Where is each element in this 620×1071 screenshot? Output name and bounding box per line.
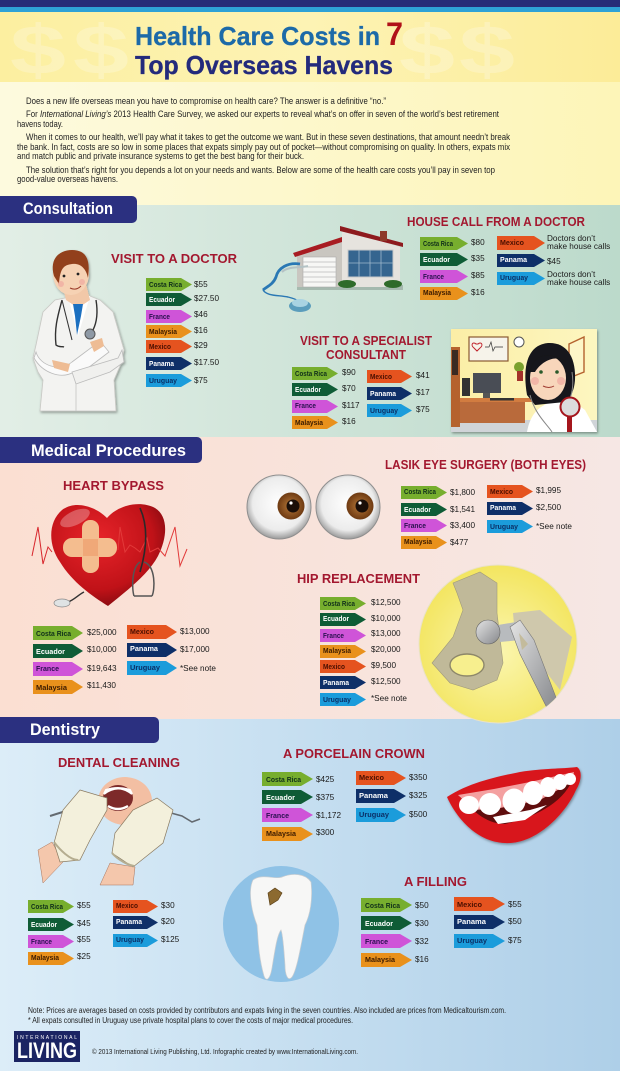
heading: Medical Procedures: Medical Procedures bbox=[31, 442, 186, 460]
icon: left eye bbox=[247, 475, 311, 539]
tag: Ecuador: Ecuador bbox=[365, 919, 393, 928]
tag: Costa Rica: $55 bbox=[194, 280, 208, 289]
intro text block: and match public and private insurance systems to get the best bang for their buck. bbox=[17, 151, 304, 161]
tag: Costa Rica bbox=[320, 597, 401, 610]
heading: visit to a doctor: VISIT TO A DOCTOR bbox=[111, 252, 237, 266]
tag: Costa Rica: $90 bbox=[342, 368, 356, 377]
chart: hip replacement prices bbox=[320, 597, 407, 706]
logo: International Living bbox=[14, 1031, 80, 1063]
dollar sign watermarks: $ bbox=[399, 11, 455, 89]
tag: Uruguay: Uruguay bbox=[149, 376, 178, 385]
chart: porcelain crown prices bbox=[262, 771, 428, 841]
tag: Costa Rica bbox=[292, 367, 356, 380]
heading: dental cleaning: DENTAL CLEANING bbox=[58, 756, 180, 770]
tag: Panama: $50 bbox=[508, 917, 522, 926]
tag: Uruguay: Uruguay bbox=[457, 936, 488, 945]
tag: Ecuador: $35 bbox=[471, 254, 485, 263]
tag: France: France bbox=[365, 937, 388, 946]
tag: Costa Rica: Costa Rica bbox=[36, 629, 72, 638]
tag: Uruguay: Uruguay bbox=[359, 810, 390, 819]
tag: France bbox=[146, 310, 208, 323]
tag: Panama: $325 bbox=[409, 791, 428, 800]
tag: Mexico: Mexico bbox=[323, 662, 345, 671]
tag: Panama: Panama bbox=[457, 917, 487, 926]
chart: specialist prices bbox=[292, 367, 430, 429]
illustration: doctor bbox=[33, 250, 124, 411]
tag: Ecuador bbox=[401, 503, 475, 516]
illustration: smiling lips bbox=[447, 767, 581, 843]
tag: Panama bbox=[356, 789, 428, 803]
tag: Mexico: $41 bbox=[416, 371, 430, 380]
tag: Ecuador: $10,000 bbox=[371, 614, 401, 623]
chart: dental cleaning prices bbox=[28, 900, 180, 965]
tag: Ecuador: $375 bbox=[316, 793, 335, 802]
tag: Uruguay bbox=[497, 270, 610, 287]
tag: Mexico: Mexico bbox=[149, 342, 171, 351]
tag: Malaysia: Malaysia bbox=[149, 327, 178, 336]
tag: Panama: $17 bbox=[416, 388, 430, 397]
intro text block: the bank. In fact, costs are so low in some places that expats simply pay out of pocket—without compromising on quality. In others, expats mix bbox=[17, 142, 511, 152]
tag: France bbox=[401, 519, 475, 532]
tag: Ecuador: Ecuador bbox=[323, 614, 349, 623]
logo: International Living: LIVING bbox=[17, 1038, 77, 1063]
tag: Mexico: Mexico bbox=[130, 627, 154, 636]
tag: Malaysia bbox=[361, 953, 429, 967]
tag: Malaysia: Malaysia bbox=[36, 683, 68, 692]
intro text block: When it comes to our health, we’ll pay what it takes to get the outcome we want. But in these seven destinations, that amount needn’t break bbox=[26, 132, 511, 142]
tag: Ecuador bbox=[262, 790, 335, 804]
tag: Uruguay: Uruguay bbox=[116, 935, 145, 944]
dollar sign watermarks: $ bbox=[10, 11, 66, 89]
tag: France: $117 bbox=[342, 401, 360, 410]
tag: Uruguay: *See note bbox=[536, 522, 572, 531]
tag: Uruguay: $500 bbox=[409, 810, 428, 819]
tag: France bbox=[320, 629, 401, 642]
tag: Panama: Panama bbox=[359, 791, 389, 800]
tag: France bbox=[292, 400, 360, 413]
tag: Panama: Panama bbox=[500, 255, 528, 264]
tag: France: $32 bbox=[415, 937, 429, 946]
tag: Mexico bbox=[320, 660, 396, 673]
heading: Consultation bbox=[0, 196, 137, 223]
chart: filling prices bbox=[361, 897, 522, 967]
tag: Panama: Panama bbox=[370, 389, 397, 398]
tag: Mexico: make house calls bbox=[547, 242, 610, 251]
tag: France: France bbox=[149, 312, 170, 321]
heading: hip replacement: HIP REPLACEMENT bbox=[297, 572, 420, 586]
tag: Malaysia: Malaysia bbox=[423, 288, 452, 297]
tag: Malaysia: $477 bbox=[450, 538, 469, 547]
tag: Panama: $17,000 bbox=[180, 645, 210, 654]
tag: Mexico: $29 bbox=[194, 341, 208, 350]
tag: Mexico: $13,000 bbox=[180, 627, 210, 636]
heading: Dentistry bbox=[0, 717, 159, 743]
tag: Costa Rica bbox=[28, 900, 91, 913]
tag: Panama: Panama bbox=[490, 503, 517, 512]
tag: Panama bbox=[113, 916, 175, 929]
tag: France: $46 bbox=[194, 310, 208, 319]
intro text block: The solution that’s right for you depends a lot on your needs and wants. Below are some of the health care costs you’ll pay in seven top bbox=[26, 165, 495, 175]
illustration: specialist in office bbox=[451, 329, 597, 432]
tag: Ecuador bbox=[320, 613, 401, 626]
tag: Malaysia: $25 bbox=[77, 952, 91, 961]
tag: Malaysia: $300 bbox=[316, 828, 335, 837]
tag: France: $19,643 bbox=[87, 664, 117, 673]
tag: Uruguay: Uruguay bbox=[323, 695, 352, 704]
chart: house call prices bbox=[420, 234, 610, 300]
heading: visit to a specialist consultant bbox=[300, 334, 432, 362]
tag: France: France bbox=[266, 811, 289, 820]
tag: Panama bbox=[146, 357, 219, 370]
tag: Mexico bbox=[146, 340, 208, 353]
heading: a filling: A FILLING bbox=[404, 875, 467, 889]
illustration: hip implant bbox=[419, 565, 577, 723]
tag: Costa Rica: $1,800 bbox=[450, 488, 475, 497]
tag: Malaysia bbox=[262, 827, 335, 841]
intro text block: For International Living’s 2013 Health Care Survey, we asked our experts to reveal what’s on offer in seven of the world’s best retirement bbox=[26, 109, 499, 119]
illustration: house with stethoscope bbox=[263, 226, 403, 312]
tag: Costa Rica: $50 bbox=[415, 901, 429, 910]
footnotes: Note: Prices are averages based on costs provided by contributors and expats living in the seven countries. Also included are prices from Medicaltourism.com. bbox=[28, 1006, 506, 1015]
tag: Costa Rica: $55 bbox=[77, 901, 91, 910]
tag: Ecuador: Ecuador bbox=[295, 385, 321, 394]
tag: Mexico: Mexico bbox=[490, 487, 513, 496]
illustration: gloved hands cleaning teeth bbox=[38, 777, 200, 885]
tag: France: France bbox=[323, 631, 344, 640]
intro text block: havens today. bbox=[17, 119, 63, 129]
tag: Mexico: Mexico bbox=[457, 900, 482, 909]
tag: Mexico: Mexico bbox=[359, 773, 384, 782]
tag: Mexico bbox=[367, 370, 430, 383]
tag: Costa Rica: $25,000 bbox=[87, 628, 117, 637]
intro text block bbox=[17, 96, 511, 184]
tag: Panama: $12,500 bbox=[371, 677, 401, 686]
illustration: pair of eyes bbox=[247, 475, 380, 539]
tag: Uruguay bbox=[454, 934, 522, 948]
heading: Medical Procedures bbox=[0, 437, 202, 463]
tag: Panama: Panama bbox=[116, 917, 143, 926]
tag: Uruguay bbox=[127, 661, 216, 675]
tag: Uruguay bbox=[367, 404, 430, 417]
illustration: heart with bandage bbox=[32, 504, 187, 607]
tag: Ecuador: $30 bbox=[415, 919, 429, 928]
tag: Panama: Panama bbox=[323, 678, 350, 687]
tag: Uruguay: $75 bbox=[416, 405, 430, 414]
tag: Uruguay: Uruguay bbox=[490, 522, 519, 531]
tag: Malaysia: Malaysia bbox=[323, 646, 352, 655]
tag: Mexico bbox=[487, 485, 561, 498]
tag: Malaysia bbox=[320, 645, 401, 658]
heading: house call from a doctor: HOUSE CALL FROM A DOCTOR bbox=[407, 215, 585, 229]
title: Top Overseas Havens bbox=[135, 50, 393, 80]
copyright line: © 2013 International Living Publishing, Ltd. Infographic created by www.InternationalLiving.com. bbox=[92, 1047, 358, 1056]
dollar sign watermarks: $ bbox=[73, 11, 129, 89]
title: Health Care Costs in bbox=[135, 21, 380, 51]
tag: Malaysia: $16 bbox=[471, 288, 485, 297]
tag: Panama bbox=[320, 676, 401, 689]
tag: Panama: $2,500 bbox=[536, 503, 561, 512]
footnotes: * All expats consulted in Uruguay use private hospital plans to cover the costs of major medical procedures. bbox=[28, 1016, 353, 1025]
tag: France bbox=[33, 662, 117, 676]
tag: Ecuador bbox=[292, 383, 356, 396]
dollar sign watermarks: $ bbox=[459, 11, 515, 89]
tag: Costa Rica bbox=[361, 898, 429, 912]
tag: Mexico bbox=[497, 234, 610, 251]
tag: Mexico bbox=[356, 771, 428, 785]
tag: France: France bbox=[31, 937, 52, 946]
tag: Uruguay bbox=[146, 374, 208, 387]
icon: right eye bbox=[316, 475, 380, 539]
tag: Uruguay: Doctors don’t bbox=[547, 270, 596, 279]
tag: France: France bbox=[36, 664, 59, 673]
tag: Malaysia bbox=[33, 680, 116, 694]
tag: Costa Rica: Costa Rica bbox=[31, 902, 64, 911]
tag: Malaysia bbox=[28, 952, 91, 965]
tag: Uruguay: $75 bbox=[508, 936, 522, 945]
tag: Costa Rica: Costa Rica bbox=[295, 369, 328, 378]
tag: Costa Rica bbox=[401, 486, 475, 499]
tag: Malaysia: Malaysia bbox=[365, 955, 396, 964]
tag: Uruguay bbox=[320, 693, 407, 706]
tag: Costa Rica: $12,500 bbox=[371, 598, 401, 607]
tag: Uruguay: $75 bbox=[194, 376, 208, 385]
tag: Ecuador bbox=[33, 644, 117, 658]
tag: France: $1,172 bbox=[316, 811, 341, 820]
tag: Costa Rica: Costa Rica bbox=[423, 239, 454, 248]
tag: Mexico bbox=[454, 897, 522, 911]
heading: Consultation: Consultation bbox=[23, 200, 113, 218]
tag: Malaysia: Malaysia bbox=[266, 829, 297, 838]
tag: Malaysia bbox=[292, 416, 356, 429]
tag: Ecuador: $1,541 bbox=[450, 505, 475, 514]
tag: Panama: $20 bbox=[161, 917, 175, 926]
chart: heart bypass prices bbox=[33, 625, 216, 694]
tag: Malaysia: $20,000 bbox=[371, 645, 401, 654]
logo: International Living: INTERNATIONAL bbox=[17, 1035, 77, 1041]
tag: Ecuador: $70 bbox=[342, 384, 356, 393]
tag: Uruguay: Uruguay bbox=[370, 406, 399, 415]
tag: Panama bbox=[127, 643, 210, 657]
tag: Ecuador bbox=[361, 916, 429, 930]
tag: Ecuador bbox=[28, 918, 91, 931]
tag: Uruguay bbox=[113, 934, 180, 947]
tag: Malaysia bbox=[420, 287, 485, 300]
tag: France bbox=[28, 935, 91, 948]
tag: Ecuador: Ecuador bbox=[423, 255, 450, 264]
intro text block: good-value overseas havens. bbox=[17, 174, 118, 184]
tag: Mexico: Mexico bbox=[370, 372, 392, 381]
tag: Mexico: Mexico bbox=[116, 901, 138, 910]
tag: Ecuador: $45 bbox=[77, 919, 91, 928]
tag: Malaysia: $16 bbox=[342, 417, 356, 426]
tag: Malaysia: Malaysia bbox=[31, 953, 60, 962]
tag: Costa Rica: Costa Rica bbox=[404, 487, 437, 496]
tag: Ecuador: Ecuador bbox=[266, 793, 295, 802]
tag: Mexico: Mexico bbox=[500, 238, 524, 247]
title bbox=[135, 16, 403, 80]
tag: France: France bbox=[423, 272, 444, 281]
tag: Uruguay: *See note bbox=[371, 694, 407, 703]
tag: France: $55 bbox=[77, 935, 91, 944]
tag: Costa Rica bbox=[146, 278, 208, 291]
tag: Panama: Panama bbox=[130, 644, 159, 653]
tag: Costa Rica bbox=[262, 772, 335, 786]
dollar sign watermarks bbox=[10, 11, 515, 89]
tag: Ecuador: Ecuador bbox=[149, 295, 175, 304]
tag: Ecuador bbox=[146, 293, 219, 306]
heading: visit to a specialist consultant: VISIT TO A SPECIALIST bbox=[300, 334, 432, 348]
tag: Ecuador bbox=[420, 253, 485, 266]
tag: Costa Rica bbox=[420, 237, 485, 250]
tag: Malaysia: Malaysia bbox=[295, 418, 324, 427]
tag: Uruguay bbox=[356, 808, 428, 822]
tag: Mexico: $30 bbox=[161, 901, 175, 910]
heading: lasik eye surgery: LASIK EYE SURGERY (BOTH EYES) bbox=[385, 458, 586, 472]
tag: Mexico: $55 bbox=[508, 900, 522, 909]
tag: France bbox=[361, 934, 429, 948]
chart: lasik prices bbox=[401, 485, 572, 549]
tag: Costa Rica: Costa Rica bbox=[266, 775, 302, 784]
tag: Mexico: Doctors don’t bbox=[547, 234, 596, 243]
tag: Ecuador: Ecuador bbox=[31, 920, 57, 929]
tag: Malaysia bbox=[146, 325, 208, 338]
tag: Mexico: $9,500 bbox=[371, 661, 396, 670]
tag: Uruguay bbox=[487, 520, 572, 533]
tag: Costa Rica: Costa Rica bbox=[323, 599, 356, 608]
tag: Malaysia: $16 bbox=[415, 955, 429, 964]
tag: Malaysia: $11,430 bbox=[87, 681, 116, 690]
heading: heart bypass: HEART BYPASS bbox=[63, 479, 164, 493]
tag: Costa Rica: $425 bbox=[316, 775, 335, 784]
tag: Mexico bbox=[113, 900, 175, 913]
tag: Ecuador: $10,000 bbox=[87, 645, 117, 654]
tag: Malaysia: Malaysia bbox=[404, 537, 433, 546]
tag: Ecuador: $27.50 bbox=[194, 294, 219, 303]
tag: Malaysia bbox=[401, 536, 469, 549]
tag: Panama: $17.50 bbox=[194, 358, 219, 367]
title: 7 bbox=[386, 16, 403, 52]
tag: Uruguay: Uruguay bbox=[130, 663, 161, 672]
tag: France: France bbox=[404, 521, 426, 530]
tag: Panama: Panama bbox=[149, 359, 175, 368]
tag: Uruguay: make house calls bbox=[547, 278, 610, 287]
tag: Costa Rica: Costa Rica bbox=[365, 901, 401, 910]
heading: a porcelain crown: A PORCELAIN CROWN bbox=[283, 747, 425, 761]
tag: Mexico bbox=[127, 625, 210, 639]
tag: Mexico: $1,995 bbox=[536, 486, 561, 495]
tag: Ecuador: Ecuador bbox=[36, 647, 65, 656]
chart: visit to a doctor prices bbox=[146, 278, 219, 387]
tag: Ecuador: Ecuador bbox=[404, 505, 431, 514]
tag: France bbox=[262, 808, 341, 822]
tag: Panama bbox=[367, 387, 430, 400]
intro text block: Does a new life overseas mean you have to compromise on health care? The answer is a definitive “no.” bbox=[26, 96, 386, 106]
tag: Costa Rica: Costa Rica bbox=[149, 280, 183, 289]
heading: Dentistry: Dentistry bbox=[30, 721, 101, 739]
tag: Panama bbox=[497, 254, 561, 267]
tag: Malaysia: $16 bbox=[194, 326, 208, 335]
tag: Panama bbox=[454, 915, 522, 929]
tag: Uruguay: Uruguay bbox=[500, 273, 529, 282]
heading: visit to a specialist consultant: CONSULTANT bbox=[326, 348, 406, 362]
tag: France: $85 bbox=[471, 271, 485, 280]
tag: Uruguay: $125 bbox=[161, 935, 180, 944]
tag: France: $3,400 bbox=[450, 521, 475, 530]
illustration: tooth with cavity bbox=[223, 866, 339, 982]
tag: Uruguay: *See note bbox=[180, 664, 216, 673]
footnotes bbox=[28, 1006, 506, 1025]
tag: France bbox=[420, 270, 485, 283]
tag: Costa Rica bbox=[33, 626, 117, 640]
tag: Panama bbox=[487, 502, 561, 515]
tag: Panama: $45 bbox=[547, 257, 561, 266]
tag: Costa Rica: $80 bbox=[471, 238, 485, 247]
tag: Mexico: $350 bbox=[409, 773, 428, 782]
tag: France: $13,000 bbox=[371, 629, 401, 638]
tag: France: France bbox=[295, 401, 316, 410]
